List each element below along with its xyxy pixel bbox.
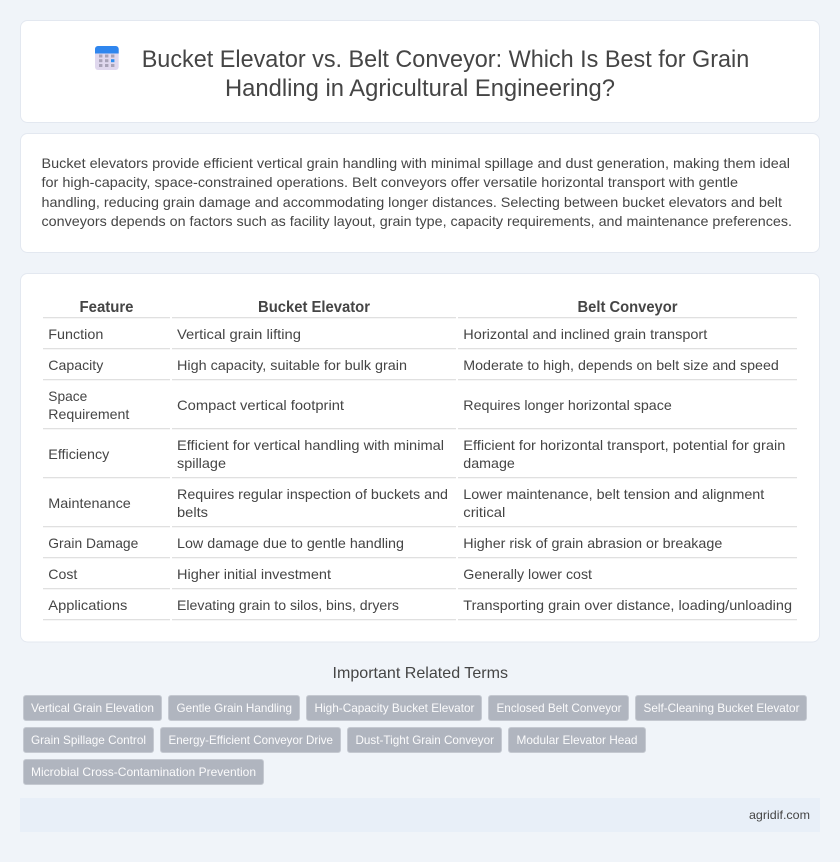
row: maintenance: critical — [463, 504, 505, 520]
row: cost: Cost — [48, 566, 77, 582]
tags: related terms: Modular Elevator Head — [516, 733, 638, 747]
panel: title card — [20, 20, 820, 122]
icon: calendar grid — [95, 46, 119, 70]
row: efficiency: spillage — [177, 455, 226, 471]
row: maintenance: belts — [177, 504, 208, 520]
tags: related terms: Enclosed Belt Conveyor — [496, 701, 622, 715]
footer bar: agridif.com — [749, 808, 810, 822]
tags: related terms: Vertical Grain Elevation — [31, 701, 154, 715]
row: maintenance — [48, 486, 764, 520]
row: cost: Higher initial investment — [177, 566, 331, 582]
row: capacity — [48, 357, 779, 373]
row: space requirement: Space — [48, 388, 88, 404]
row: efficiency: damage — [463, 455, 515, 471]
panel: intro text: Bucket elevators provide efficient vertical grain handling with minimal spillage and dust generation, making them ideal — [42, 155, 790, 171]
row: efficiency: Efficient for vertical handling with minimal — [177, 437, 444, 453]
row: cost: Generally lower cost — [463, 566, 592, 582]
row: function: Horizontal and inclined grain transport — [463, 326, 707, 342]
row: applications: Elevating grain to silos, bins, dryers — [177, 597, 399, 613]
row: efficiency — [48, 437, 785, 471]
row: grain damage: Higher risk of grain abrasion or breakage — [463, 535, 723, 551]
row: applications: Transporting grain over distance, loading/unloading — [463, 597, 792, 613]
row: maintenance: Lower maintenance, belt tension and alignment — [463, 486, 764, 502]
row: function: Function — [48, 326, 103, 342]
row: efficiency: Efficiency — [48, 446, 109, 462]
row: grain damage: Low damage due to gentle handling — [177, 535, 404, 551]
title — [142, 46, 749, 102]
tags: related terms: Dust-Tight Grain Conveyor — [356, 733, 494, 747]
title: Bucket Elevator vs. Belt Conveyor: Which Is Best for Grain — [142, 46, 749, 73]
row: maintenance: Requires regular inspection of buckets and — [177, 486, 448, 502]
table header row — [80, 299, 678, 316]
panel: intro text: for high-capacity, space-constrained operations. Belt conveyors offer versatile horizontal transport with gentle — [42, 174, 738, 190]
row: efficiency: Efficient for horizontal transport, potential for grain — [463, 437, 785, 453]
table header row: Belt Conveyor — [578, 299, 678, 316]
row: capacity: High capacity, suitable for bulk grain — [177, 357, 407, 373]
table header row: Feature — [80, 299, 134, 316]
row: function: Vertical grain lifting — [177, 326, 301, 342]
table header row: Bucket Elevator — [258, 299, 370, 316]
row: space requirement: Requires longer horizontal space — [463, 397, 672, 413]
row: applications: Applications — [48, 597, 127, 613]
heading: related terms: Important Related Terms — [332, 665, 508, 682]
row: capacity: Capacity — [48, 357, 103, 373]
title: Handling in Agricultural Engineering? — [225, 75, 615, 102]
row: space requirement — [48, 388, 672, 422]
row: capacity: Moderate to high, depends on belt size and speed — [463, 357, 779, 373]
panel: intro text — [20, 134, 820, 252]
panel: comparison table — [20, 274, 820, 642]
tags: related terms: Gentle Grain Handling — [176, 701, 292, 715]
tags: related terms: Energy-Efficient Conveyor Drive — [168, 733, 333, 747]
tags: related terms: Microbial Cross-Contamination Prevention — [31, 765, 256, 779]
row: applications — [48, 597, 792, 613]
tags: related terms — [24, 696, 806, 784]
row: grain damage — [48, 535, 723, 551]
panel: intro text: handling, reducing grain damage and accommodating longer distances. Selecting between bucket elevators and belt — [42, 194, 782, 210]
row: maintenance: Maintenance — [48, 495, 131, 511]
row: cost — [48, 566, 592, 582]
tags: related terms: Grain Spillage Control — [31, 733, 146, 747]
row: space requirement: Compact vertical footprint — [177, 397, 344, 413]
row: function — [48, 326, 707, 342]
row: grain damage: Grain Damage — [48, 535, 139, 551]
tags: related terms: Self-Cleaning Bucket Elevator — [644, 701, 800, 715]
footer bar — [20, 798, 820, 832]
panel: intro text: conveyors depends on factors such as facility layout, grain type, capacity requirements, and maintenance preferences. — [42, 213, 792, 229]
tags: related terms: High-Capacity Bucket Elevator — [314, 701, 474, 715]
row: space requirement: Requirement — [48, 406, 129, 422]
